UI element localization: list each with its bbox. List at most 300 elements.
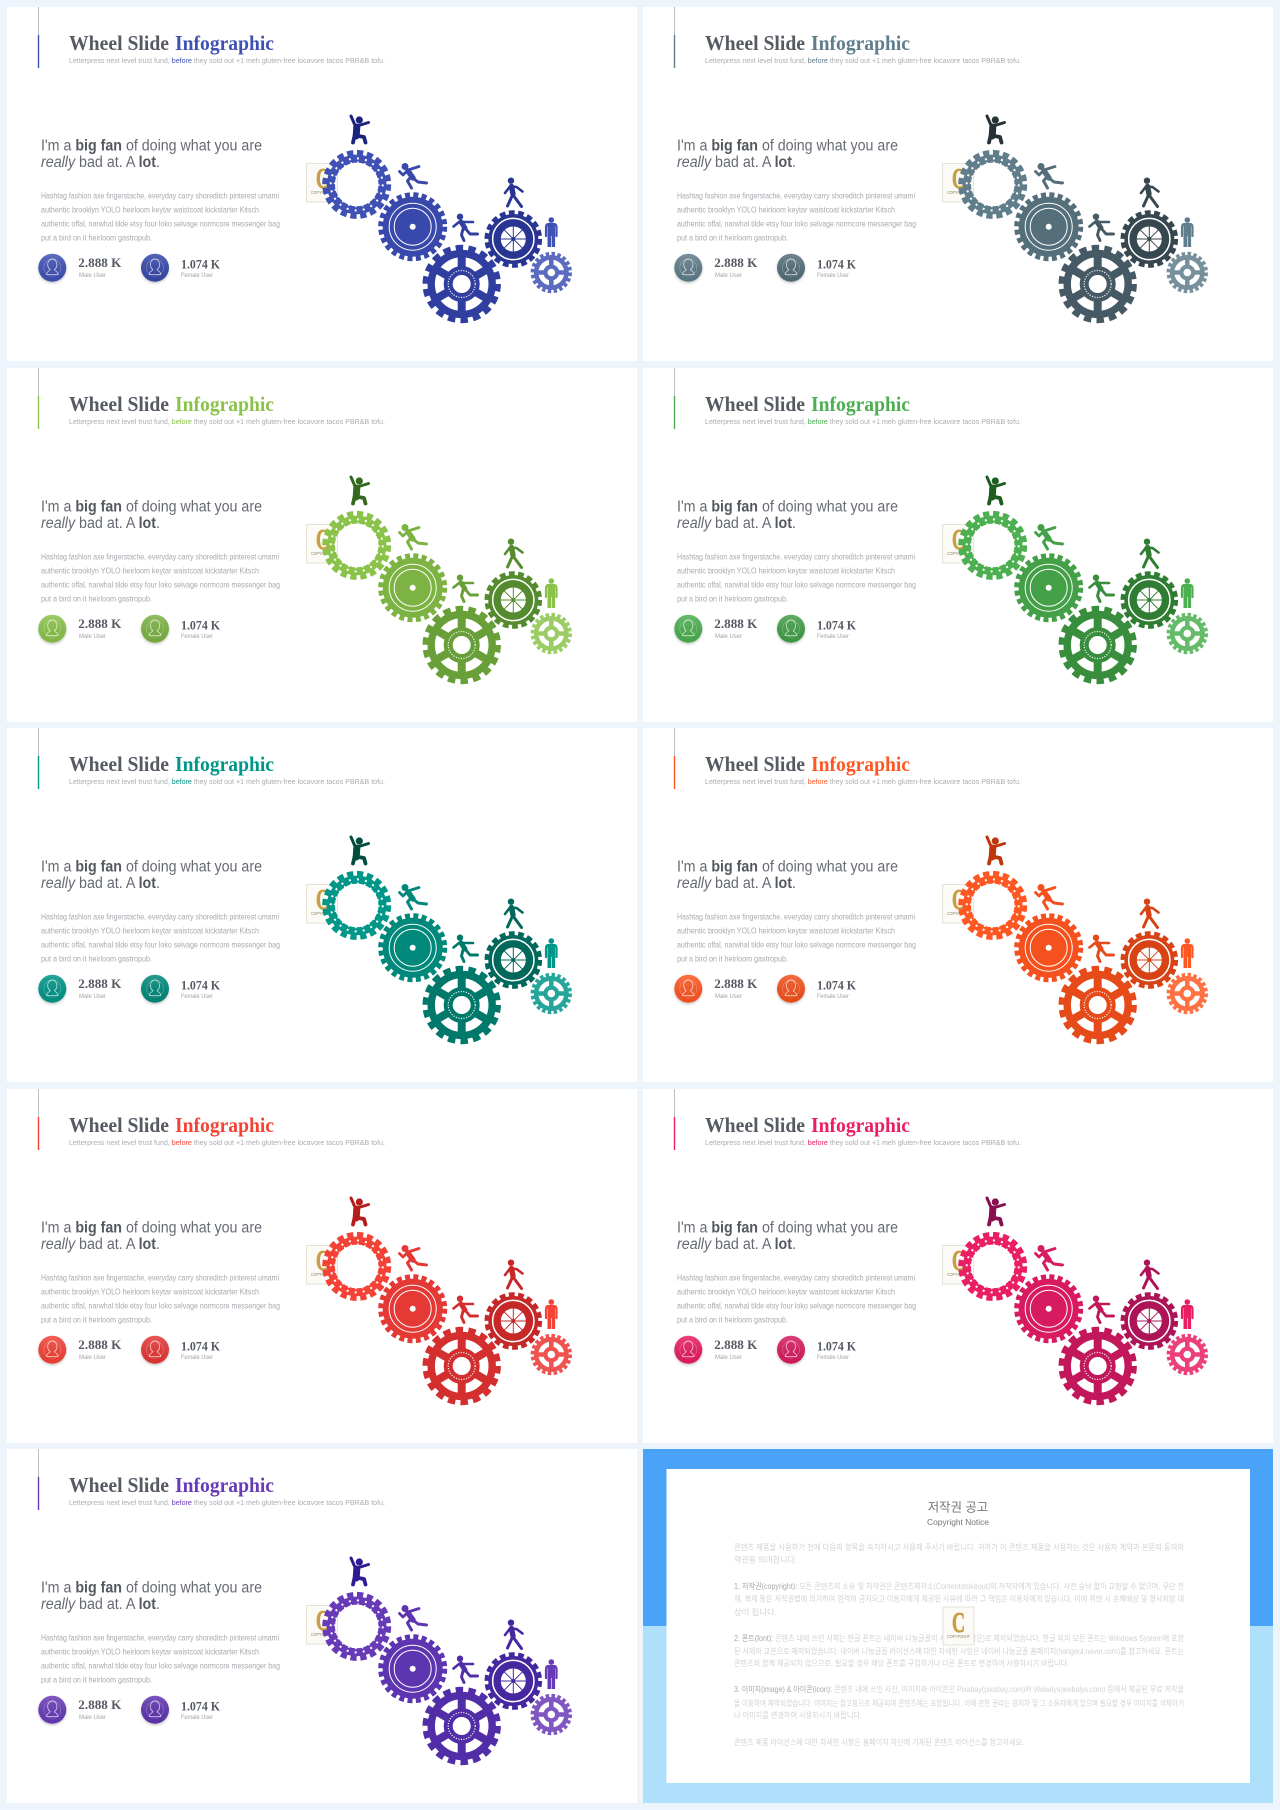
title: Wheel Slide (69, 752, 169, 776)
gear 4 (1123, 934, 1176, 986)
gear 1 (961, 1234, 1024, 1297)
stat: female user: Female User (181, 272, 214, 279)
stat: male user (674, 975, 758, 1003)
body text: authentic offal, narwhal tilde etsy four loko selvage normcore messenger bag (677, 940, 916, 950)
figure: standing person (1182, 1299, 1192, 1328)
stat: female user (141, 1696, 220, 1724)
gear 3 (426, 969, 498, 1041)
panel: light green slide (7, 368, 637, 722)
gear 4 (487, 934, 540, 986)
figure: runner 1 (400, 524, 426, 548)
gear 2 (1017, 916, 1081, 980)
stat: male user: 2.888 K (714, 1338, 758, 1352)
title (69, 752, 274, 776)
stat: female user: 1.074 K (181, 618, 220, 632)
title (705, 392, 910, 416)
stat: male user: Male User (79, 1714, 107, 1721)
accent rule (38, 368, 39, 428)
title: Infographic (175, 392, 274, 416)
stat: female user: 1.074 K (817, 258, 856, 272)
accent rule (674, 728, 675, 789)
notice section 3: 3. 이미지(image) & 아이콘(icon): 콘텐츠 내에 쓰인 사진, 이미지와 아이콘은 Pixabay(pixabay.com)와 Webalys(webalys.com) 등에서 제공된 무료 저작물 (734, 1684, 1184, 1694)
headline: really bad at. A lot. (41, 1596, 160, 1613)
body text: Hashtag fashion axe fingerstache, everyday carry shoreditch pinterest umami (677, 912, 915, 922)
figure: jumping person (351, 476, 368, 503)
notice section 3 (734, 1684, 1184, 1720)
subtitle: Letterpress next level trust fund, before they sold out +1 meh gluten-free locavore tacos PBR&B tofu. (69, 1498, 385, 1507)
body text (41, 1272, 280, 1324)
body text (677, 190, 916, 242)
gear 4 (487, 1654, 540, 1708)
gear 4 (487, 573, 540, 626)
figure: runner 1 (400, 1244, 426, 1270)
body text: put a bird on it heirloom gastropub. (41, 1314, 152, 1324)
gear 1 (325, 513, 388, 576)
figure: walking person (1141, 538, 1158, 567)
figure: runner 2 (454, 574, 478, 601)
watermark logo: COPYRIGHT (947, 550, 969, 556)
panel: deep purple slide (7, 1449, 637, 1803)
gear 3 (426, 1330, 498, 1402)
subtitle: Letterpress next level trust fund, before they sold out +1 meh gluten-free locavore tacos PBR&B tofu. (705, 1138, 1021, 1146)
accent rule (38, 1088, 39, 1150)
subtitle: Letterpress next level trust fund, before they sold out +1 meh gluten-free locavore tacos PBR&B tofu. (69, 416, 385, 426)
headline (41, 1580, 262, 1613)
subtitle: Letterpress next level trust fund, before they sold out +1 meh gluten-free locavore tacos PBR&B tofu. (69, 1138, 385, 1146)
gear 1 (325, 874, 388, 937)
gear 5 (532, 975, 570, 1012)
gear 2 (381, 1637, 445, 1701)
title: Infographic (175, 1112, 274, 1136)
stat: female user: 1.074 K (817, 618, 856, 632)
body text: authentic brooklyn YOLO heirloom keytar waistcoat kickstarter Kitsch (41, 926, 259, 936)
stat: female user: Female User (181, 993, 214, 1000)
stat: female user (777, 1335, 856, 1363)
watermark logo: COPYRIGHT (311, 550, 333, 556)
headline: I'm a big fan of doing what you are (677, 498, 898, 515)
headline: really bad at. A lot. (677, 514, 796, 532)
gear diagram with figures (325, 1198, 570, 1402)
watermark logo (942, 1245, 974, 1284)
notice intro (734, 1542, 1184, 1564)
gear 2 (381, 195, 445, 259)
title: Infographic (175, 1473, 274, 1497)
notice section 2 (734, 1633, 1184, 1668)
title: Wheel Slide (69, 1473, 169, 1497)
stat: female user: 1.074 K (181, 258, 220, 272)
headline (677, 138, 898, 171)
figure: runner 2 (1090, 934, 1114, 962)
stat: male user: Male User (79, 993, 107, 1000)
title (705, 752, 910, 776)
subtitle: Letterpress next level trust fund, before they sold out +1 meh gluten-free locavore tacos PBR&B tofu. (69, 56, 385, 65)
body text: authentic brooklyn YOLO heirloom keytar waistcoat kickstarter Kitsch (677, 1286, 895, 1296)
figure: walking person (505, 898, 522, 928)
body text: Hashtag fashion axe fingerstache, everyday carry shoreditch pinterest umami (677, 1272, 915, 1282)
headline (677, 1219, 898, 1252)
figure: standing person (1182, 578, 1192, 608)
watermark logo (306, 524, 338, 562)
watermark logo (943, 1607, 974, 1645)
figure: runner 2 (454, 214, 478, 240)
notice section 3: 나 이미지를 변경하여 사용하시기 바랍니다. (734, 1710, 862, 1720)
headline: I'm a big fan of doing what you are (677, 858, 898, 876)
figure: standing person (546, 1659, 556, 1689)
figure: standing person (546, 938, 556, 968)
gear diagram with figures (961, 476, 1206, 680)
body text (41, 551, 280, 603)
notice heading (927, 1500, 989, 1527)
gear 4 (487, 212, 540, 266)
title: Infographic (811, 752, 910, 776)
notice footer: 콘텐츠 제품 라이선스에 대한 자세한 사항은 홈페이지 하단에 기재된 콘텐츠 라이선스를 참고하세요. (734, 1737, 1024, 1747)
watermark logo (306, 1606, 338, 1644)
notice section 2: 된 서체와 교본으로 제작되었습니다. 네이버 나눔글꼴 라이선스에 대한 자세한 사항은 네이버 나눔글꼴 홈페이지(hangeul.naver.com)를 참고하세요. 폰트는 (734, 1646, 1184, 1656)
notice section 1: 재, 복제 등은 저작권법에 의거하여 엄격히 금지되고 이용자에게 제공된 사유에 따라 그 책임은 이용자에게 있습니다. 이에 위반 시 손해배상 및 형사처벌 대 (734, 1594, 1184, 1604)
stat: male user: Male User (79, 1354, 107, 1360)
body text (677, 912, 916, 964)
panel: deep orange slide (643, 728, 1273, 1082)
stat: male user (674, 1335, 758, 1363)
white notice card (666, 1469, 1250, 1783)
figure: jumping person (351, 1558, 368, 1584)
subtitle: Letterpress next level trust fund, before they sold out +1 meh gluten-free locavore tacos PBR&B tofu. (69, 777, 385, 786)
body text: put a bird on it heirloom gastropub. (677, 232, 788, 242)
gear 5 (1168, 1335, 1206, 1373)
notice section 1: 상이 됩니다. (734, 1607, 777, 1617)
body text: Hashtag fashion axe fingerstache, everyday carry shoreditch pinterest umami (41, 912, 279, 922)
title: Infographic (811, 1112, 910, 1136)
headline: I'm a big fan of doing what you are (41, 498, 262, 515)
stat: female user (141, 254, 220, 282)
gear 4 (1123, 573, 1176, 626)
headline (41, 1219, 262, 1252)
light blue frame bottom (643, 1626, 1273, 1803)
gear 3 (1062, 969, 1134, 1041)
body text: Hashtag fashion axe fingerstache, everyday carry shoreditch pinterest umami (41, 551, 279, 561)
figure: walking person (505, 178, 522, 206)
gear 4 (1123, 1294, 1176, 1347)
gear 2 (1017, 555, 1081, 619)
gear 5 (532, 1335, 570, 1373)
stat: male user: 2.888 K (78, 256, 122, 270)
subtitle: Letterpress next level trust fund, before they sold out +1 meh gluten-free locavore tacos PBR&B tofu. (705, 416, 1021, 426)
stat: male user (674, 254, 758, 282)
watermark logo: C (952, 1246, 965, 1276)
gear 2 (1017, 1276, 1081, 1340)
title: Wheel Slide (69, 31, 169, 55)
accent rule (674, 1088, 675, 1150)
stat: male user: Male User (715, 993, 743, 1000)
stat: female user: 1.074 K (181, 978, 220, 992)
body text: authentic brooklyn YOLO heirloom keytar waistcoat kickstarter Kitsch (677, 204, 895, 214)
watermark logo: COPYRIGHT (947, 1634, 970, 1639)
notice section 2: 2. 폰트(font): 콘텐츠 내에 쓰인 서체는 한글 폰트는 네이버 나눔글꼴의 서체(또는 맑은)로 제작되었습니다. 한글 외의 모든 폰트는 Windows System에 포함 (734, 1633, 1184, 1643)
figure: walking person (505, 538, 522, 567)
figure: jumping person (987, 1198, 1004, 1224)
gear 4 (487, 1294, 540, 1347)
stat: male user: Male User (715, 1354, 743, 1360)
stat: female user (777, 614, 856, 642)
watermark logo: COPYRIGHT (947, 911, 969, 916)
watermark logo (942, 164, 974, 202)
figure: runner 2 (1090, 574, 1114, 601)
headline (41, 858, 262, 892)
stat: female user: Female User (817, 272, 850, 279)
figure: standing person (1182, 938, 1192, 968)
body text: authentic offal, narwhal tilde etsy four loko selvage normcore messenger bag (41, 218, 280, 228)
panel: copyright notice (643, 1449, 1273, 1803)
stat: male user: 2.888 K (714, 977, 758, 991)
gear 5 (1168, 975, 1206, 1012)
figure: walking person (1141, 1259, 1158, 1288)
figure: walking person (1141, 178, 1158, 206)
gear 4 (1123, 212, 1176, 266)
stat: male user: 2.888 K (78, 1338, 122, 1352)
headline (677, 858, 898, 892)
title: Infographic (175, 31, 274, 55)
headline: I'm a big fan of doing what you are (41, 1219, 262, 1236)
body text: put a bird on it heirloom gastropub. (41, 232, 152, 242)
notice intro: 약관을 의미합니다. (734, 1554, 797, 1564)
title: Wheel Slide (705, 752, 805, 776)
accent rule (38, 728, 39, 789)
stat: female user (777, 254, 856, 282)
gear diagram with figures (325, 837, 570, 1041)
stat: female user: Female User (817, 632, 850, 640)
figure: jumping person (987, 476, 1004, 503)
watermark logo: C (316, 1606, 329, 1637)
body text: authentic offal, narwhal tilde etsy four loko selvage normcore messenger bag (41, 579, 280, 589)
figure: jumping person (987, 837, 1004, 864)
headline: really bad at. A lot. (677, 154, 796, 171)
stat: male user: 2.888 K (714, 256, 758, 270)
gear 3 (1062, 608, 1134, 680)
body text: put a bird on it heirloom gastropub. (41, 1674, 152, 1684)
stat: male user (38, 254, 122, 282)
headline: really bad at. A lot. (41, 875, 160, 892)
title (69, 1112, 274, 1136)
gear 5 (532, 1696, 570, 1733)
panel: teal slide (7, 728, 637, 1082)
stat: female user: Female User (181, 1714, 214, 1721)
body text: put a bird on it heirloom gastropub. (41, 954, 152, 964)
headline (41, 138, 262, 171)
figure: runner 2 (1090, 1295, 1114, 1322)
gear diagram with figures (325, 476, 570, 680)
stat: male user: Male User (715, 272, 743, 279)
subtitle: Letterpress next level trust fund, before they sold out +1 meh gluten-free locavore tacos PBR&B tofu. (705, 56, 1021, 65)
body text: Hashtag fashion axe fingerstache, everyday carry shoreditch pinterest umami (41, 1632, 279, 1642)
stat: female user: Female User (181, 632, 214, 640)
notice section 1 (734, 1581, 1184, 1617)
gear 5 (1168, 254, 1206, 291)
panel: green slide (643, 368, 1273, 722)
gear 3 (1062, 1330, 1134, 1402)
figure: jumping person (351, 1198, 368, 1224)
headline: really bad at. A lot. (41, 154, 160, 171)
stat: male user (38, 975, 122, 1003)
watermark logo: C (952, 1608, 965, 1639)
body text: Hashtag fashion axe fingerstache, everyday carry shoreditch pinterest umami (677, 551, 915, 561)
stat: male user: 2.888 K (714, 616, 758, 630)
stat: male user (38, 614, 122, 642)
gear 5 (532, 614, 570, 652)
stat: male user: Male User (715, 632, 743, 640)
body text: authentic brooklyn YOLO heirloom keytar waistcoat kickstarter Kitsch (41, 204, 259, 214)
gear 2 (381, 916, 445, 980)
body text: Hashtag fashion axe fingerstache, everyday carry shoreditch pinterest umami (677, 190, 915, 200)
title: Infographic (811, 392, 910, 416)
stat: female user: 1.074 K (817, 1339, 856, 1353)
stat: male user: Male User (79, 632, 107, 640)
figure: standing person (546, 217, 556, 247)
figure: runner 2 (454, 1656, 478, 1682)
figure: runner 2 (454, 1295, 478, 1322)
watermark logo: COPYRIGHT (311, 911, 333, 916)
watermark logo (942, 884, 974, 923)
watermark logo (942, 524, 974, 562)
gear 1 (961, 513, 1024, 576)
body text: authentic offal, narwhal tilde etsy four loko selvage normcore messenger bag (41, 940, 280, 950)
title (69, 392, 274, 416)
accent rule (38, 1449, 39, 1510)
notice section 1: 1. 저작권(copyright): 모든 콘텐츠의 소유 및 저작권은 콘텐츠제작소(Contentstokeout)의 저작자에게 있습니다. 사전 승낙 없이 교환할 수 없으며, 무단 전 (734, 1581, 1184, 1591)
headline: really bad at. A lot. (677, 875, 796, 892)
watermark logo: COPYRIGHT (947, 1272, 969, 1276)
watermark logo: COPYRIGHT (947, 190, 969, 195)
panel: indigo slide (7, 7, 637, 361)
figure: jumping person (987, 116, 1004, 142)
title: Wheel Slide (705, 31, 805, 55)
watermark logo: C (952, 164, 965, 195)
watermark logo: C (316, 1246, 329, 1276)
body text: authentic offal, narwhal tilde etsy four loko selvage normcore messenger bag (677, 579, 916, 589)
watermark logo: COPYRIGHT (311, 1272, 333, 1276)
gear 2 (381, 1276, 445, 1340)
accent rule (38, 7, 39, 68)
headline: I'm a big fan of doing what you are (41, 858, 262, 876)
stat: female user: 1.074 K (181, 1700, 220, 1714)
title (705, 1112, 910, 1136)
panel: blue grey slide (643, 7, 1273, 361)
headline (41, 498, 262, 532)
body text (677, 551, 916, 603)
figure: runner 1 (1036, 1244, 1062, 1270)
stat: male user: Male User (79, 272, 107, 279)
body text: authentic offal, narwhal tilde etsy four loko selvage normcore messenger bag (41, 1300, 280, 1310)
figure: standing person (546, 1299, 556, 1328)
figure: runner 1 (1036, 884, 1062, 909)
watermark logo (306, 164, 338, 202)
body text: Hashtag fashion axe fingerstache, everyday carry shoreditch pinterest umami (41, 1272, 279, 1282)
figure: standing person (1182, 217, 1192, 247)
stat: female user: Female User (817, 993, 850, 1000)
gear 1 (325, 1595, 388, 1658)
watermark logo: C (952, 885, 965, 916)
gear diagram with figures (961, 837, 1206, 1041)
gear 3 (426, 1690, 498, 1762)
headline: really bad at. A lot. (41, 514, 160, 532)
title (69, 31, 274, 55)
title (69, 1473, 274, 1497)
figure: walking person (505, 1259, 522, 1288)
body text (677, 1272, 916, 1324)
body text: put a bird on it heirloom gastropub. (677, 593, 788, 603)
stat: male user: 2.888 K (78, 977, 122, 991)
notice heading: 저작권 공고 (928, 1500, 988, 1514)
figure: runner 2 (454, 934, 478, 962)
stat: male user (38, 1335, 122, 1363)
watermark logo: C (952, 524, 965, 556)
accent rule (674, 368, 675, 428)
title: Infographic (175, 752, 274, 776)
body text: put a bird on it heirloom gastropub. (41, 593, 152, 603)
gear 1 (325, 153, 388, 216)
body text: authentic brooklyn YOLO heirloom keytar waistcoat kickstarter Kitsch (41, 1286, 259, 1296)
gear 5 (1168, 614, 1206, 652)
title: Wheel Slide (69, 392, 169, 416)
headline: really bad at. A lot. (677, 1236, 796, 1252)
body text: authentic brooklyn YOLO heirloom keytar waistcoat kickstarter Kitsch (41, 565, 259, 575)
headline: I'm a big fan of doing what you are (677, 1219, 898, 1236)
body text (41, 1632, 280, 1684)
gear 1 (961, 874, 1024, 937)
stat: male user (38, 1696, 122, 1724)
figure: runner 1 (1036, 163, 1062, 188)
watermark logo: C (316, 164, 329, 195)
gear diagram with figures (325, 116, 570, 320)
title: Infographic (811, 31, 910, 55)
watermark logo (306, 1245, 338, 1284)
panel: pink slide (643, 1088, 1273, 1442)
figure: runner 1 (400, 163, 426, 188)
gear diagram with figures (961, 116, 1206, 320)
body text: authentic offal, narwhal tilde etsy four loko selvage normcore messenger bag (677, 1300, 916, 1310)
title (705, 31, 910, 55)
figure: runner 2 (1090, 214, 1114, 240)
body text: authentic offal, narwhal tilde etsy four loko selvage normcore messenger bag (677, 218, 916, 228)
gear 3 (426, 608, 498, 680)
watermark logo: C (316, 885, 329, 916)
body text: authentic brooklyn YOLO heirloom keytar waistcoat kickstarter Kitsch (41, 1646, 259, 1656)
headline: I'm a big fan of doing what you are (677, 138, 898, 154)
gear 1 (961, 153, 1024, 216)
figure: walking person (505, 1620, 522, 1648)
watermark logo: C (316, 524, 329, 556)
notice section 2: 콘텐츠와 함께 제공되지 않으므로, 필요할 경우 해당 폰트를 구입하거나 다른 폰트로 변경하여 사용하시기 바랍니다. (734, 1658, 1069, 1668)
stat: male user: 2.888 K (78, 1698, 122, 1712)
stat: female user (141, 1335, 220, 1363)
gear 3 (1062, 248, 1134, 320)
stat: female user: 1.074 K (181, 1339, 220, 1353)
body text: authentic brooklyn YOLO heirloom keytar waistcoat kickstarter Kitsch (677, 565, 895, 575)
stat: female user: Female User (181, 1354, 214, 1360)
gear 3 (426, 248, 498, 320)
headline (677, 498, 898, 532)
body text (41, 190, 280, 242)
body text: authentic offal, narwhal tilde etsy four loko selvage normcore messenger bag (41, 1660, 280, 1670)
figure: jumping person (351, 837, 368, 864)
title: Wheel Slide (705, 392, 805, 416)
gear 5 (532, 254, 570, 291)
stat: female user (141, 614, 220, 642)
stat: female user (777, 975, 856, 1003)
gear diagram with figures (961, 1198, 1206, 1402)
body text: put a bird on it heirloom gastropub. (677, 1314, 788, 1324)
accent rule (674, 7, 675, 68)
figure: walking person (1141, 898, 1158, 928)
